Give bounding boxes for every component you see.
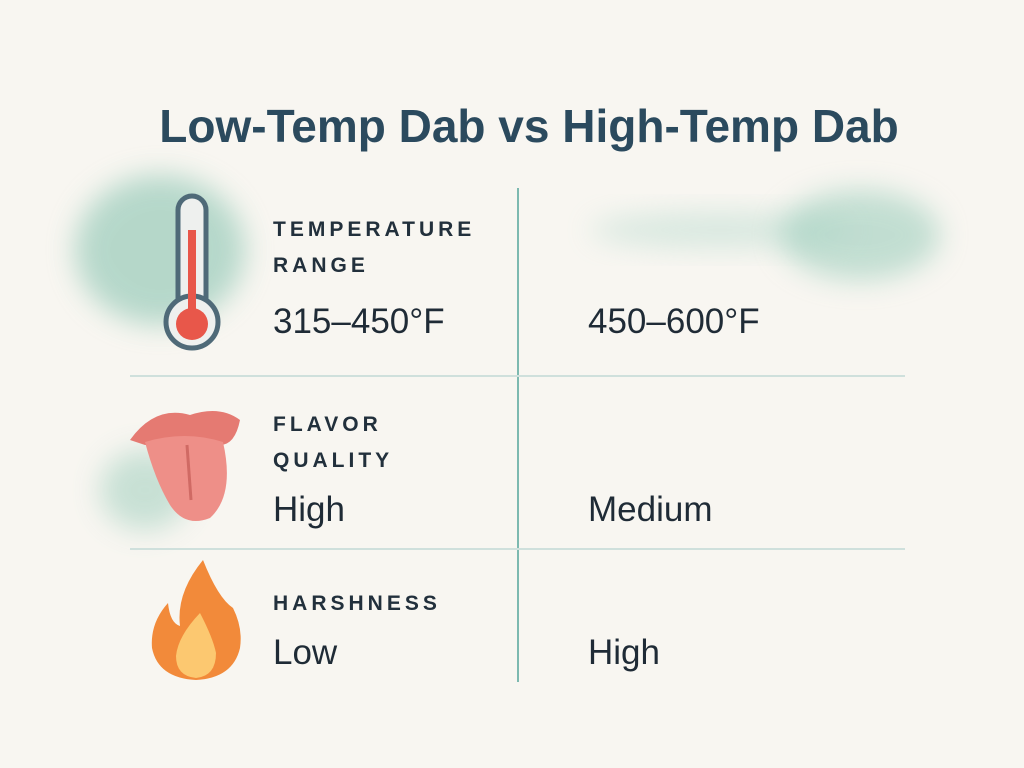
value: high harshness: High (588, 633, 660, 672)
row 1: temperature range: RANGE (273, 254, 369, 277)
row 3: harshness: HARSHNESS (273, 592, 441, 615)
value: high temp range: 450–600°F (588, 302, 760, 341)
row 2: flavor quality: FLAVOR (273, 413, 382, 436)
row 1: temperature range (273, 218, 475, 277)
icon: thermometer (164, 194, 220, 350)
row 1: temperature range: TEMPERATURE (273, 218, 475, 241)
value: medium: Medium (588, 490, 712, 529)
row 2: flavor quality (273, 413, 393, 472)
value: low temp range: 315–450°F (273, 302, 445, 341)
row 2: flavor quality: QUALITY (273, 449, 393, 472)
icon: tongue (130, 411, 240, 521)
icon: flame (152, 560, 241, 680)
value: high: High (273, 490, 345, 529)
title: Low-Temp Dab vs High-Temp Dab (159, 100, 899, 152)
value: low: Low (273, 633, 337, 672)
